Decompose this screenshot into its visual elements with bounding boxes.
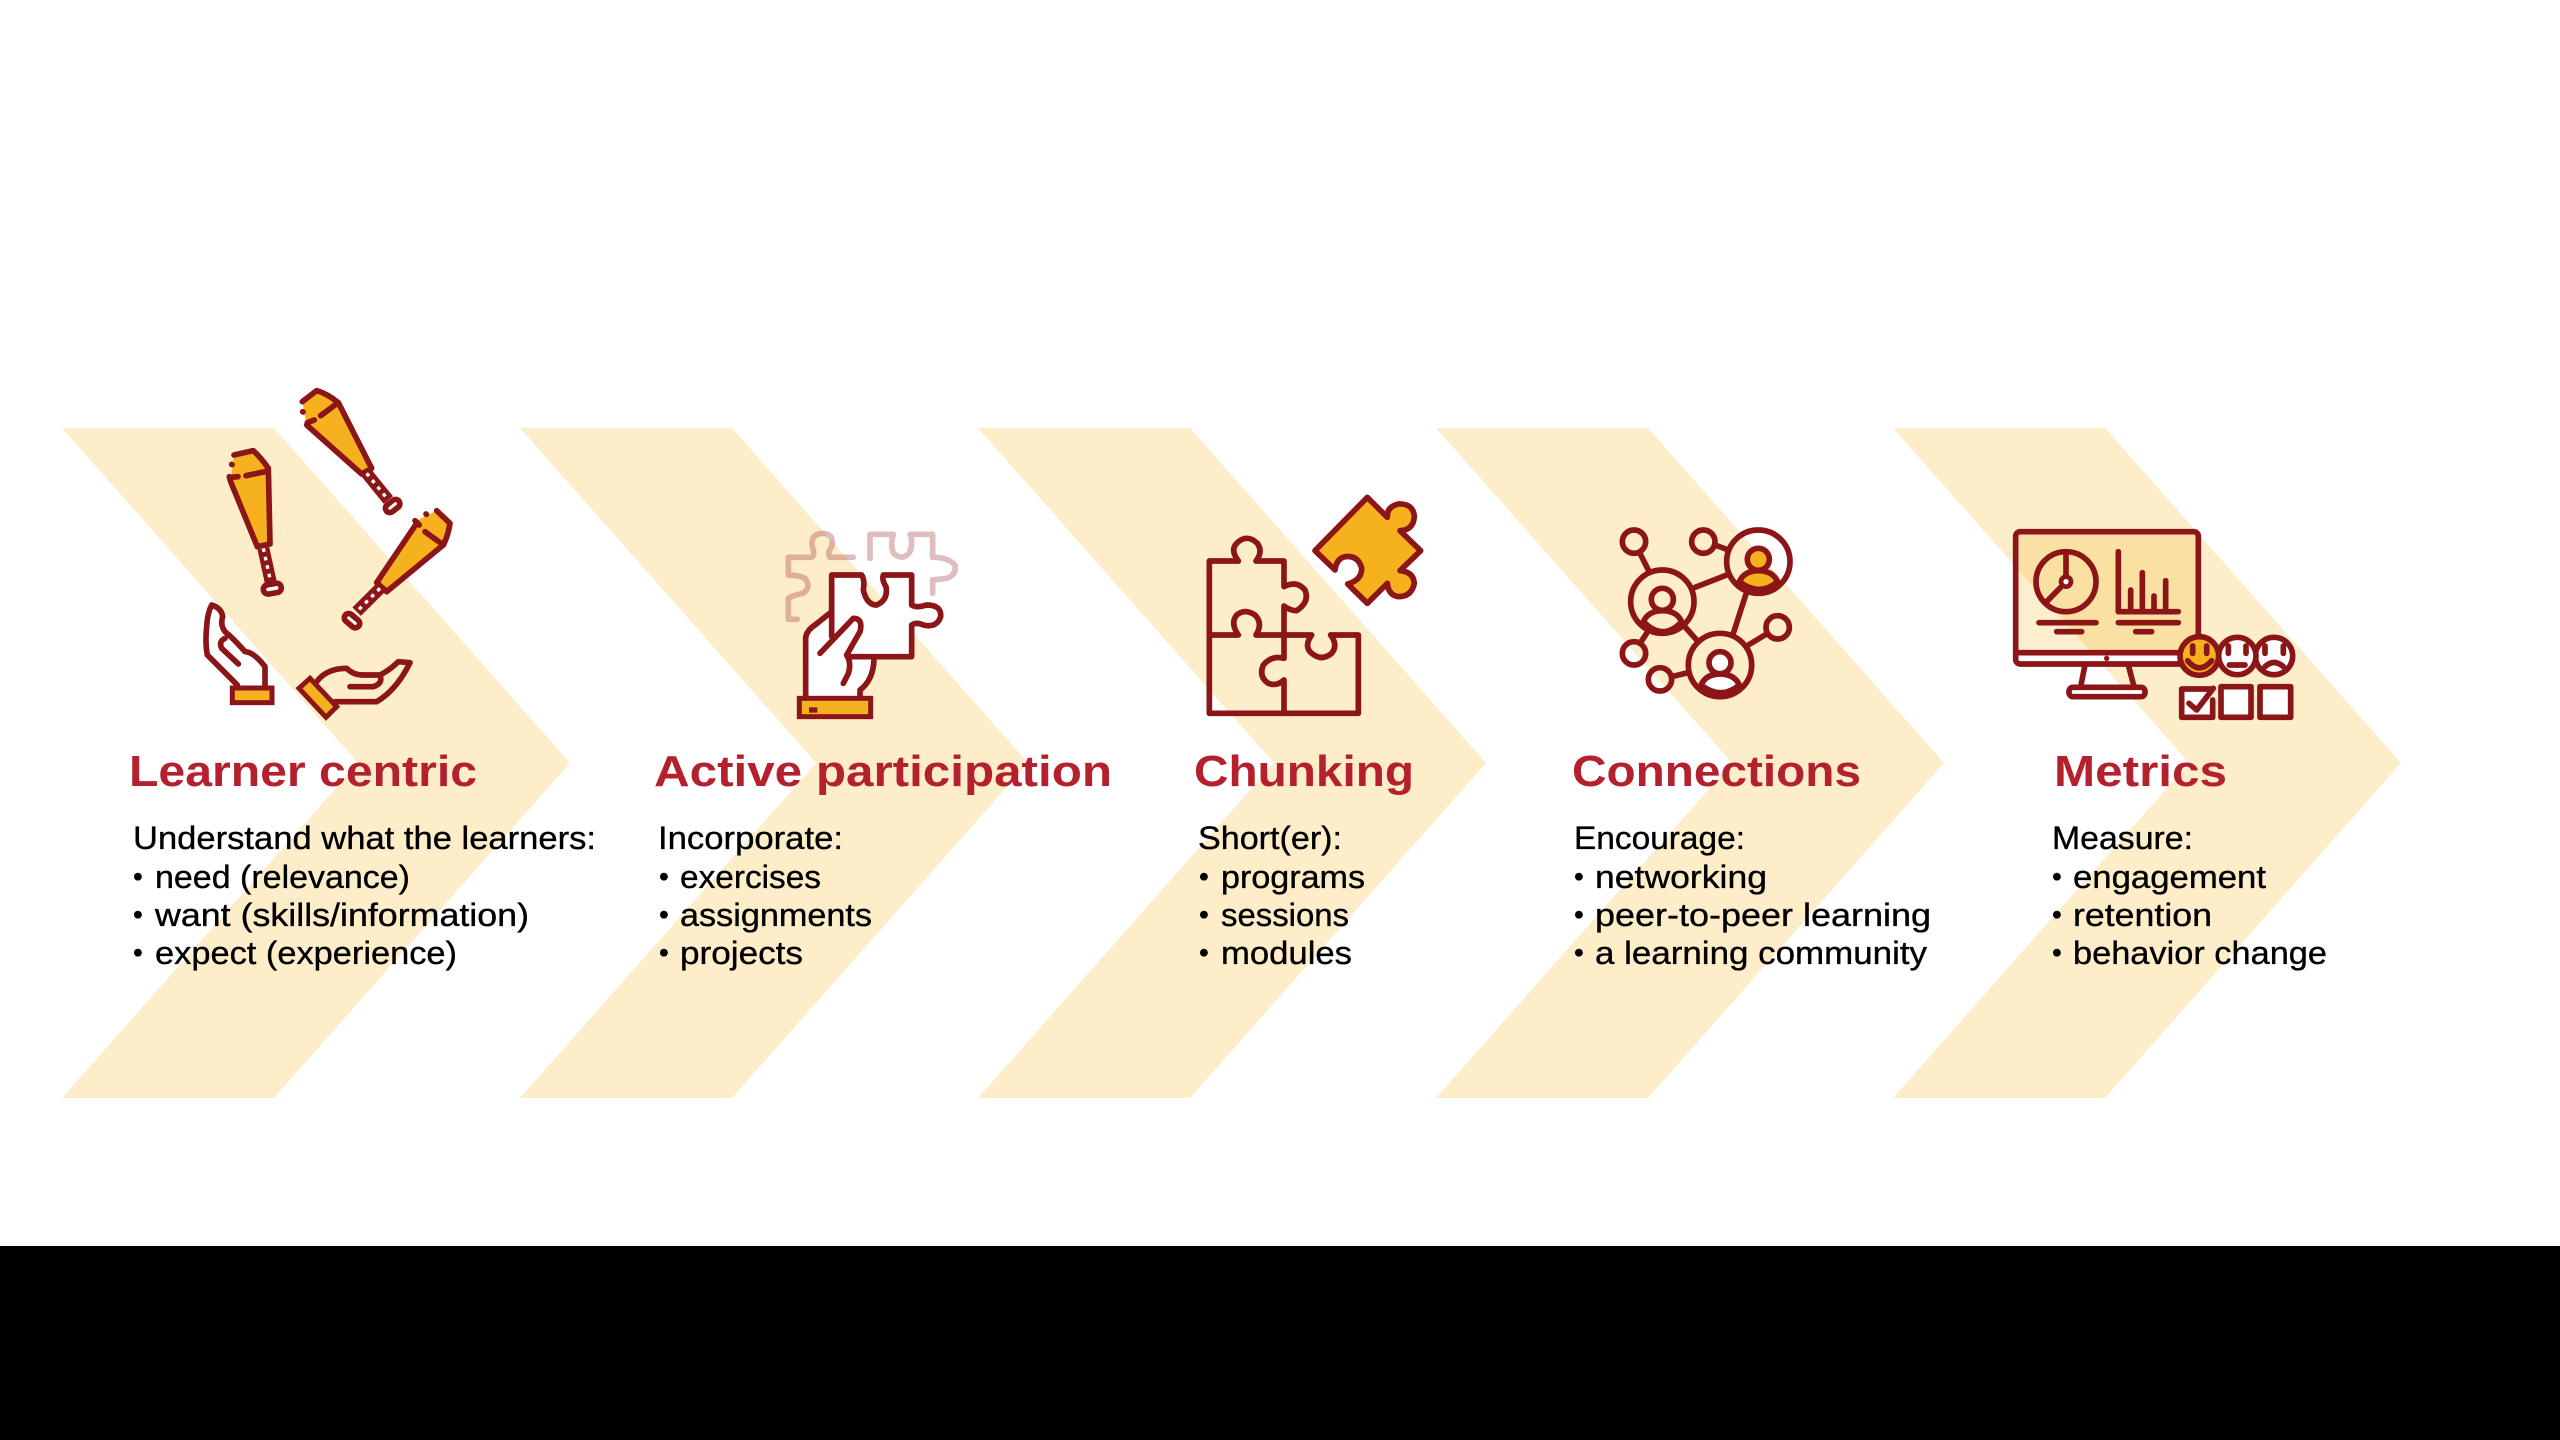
text block: • [2052,899,2062,930]
club right [343,511,450,630]
text block: • [133,861,143,892]
left hand [206,605,272,703]
text block [133,820,596,971]
text block: peer-to-peer learning [1595,897,1931,933]
text block: • [2052,861,2062,892]
heading: Active participation [654,747,1112,796]
text block: • [133,899,143,930]
text block: Measure: [2052,820,2193,856]
heading: Metrics [2054,747,2227,796]
text block [1574,820,1931,971]
assembled pieces [1209,538,1358,713]
icon: hand holding puzzle piece [788,533,955,717]
text block: modules [1221,935,1352,971]
text block: • [659,899,669,930]
text block: sessions [1221,897,1349,933]
chevron arrows [62,428,2401,1098]
icon: monitor dashboard with ratings [2016,532,2293,717]
faded puzzle pieces [788,533,955,619]
text block: programs [1221,859,1365,895]
happy face [2180,637,2219,675]
heading: Learner centric [129,747,477,796]
text block: Incorporate: [658,820,843,856]
text block: retention [2073,897,2212,933]
text block: exercises [680,859,821,895]
text block [2052,820,2327,971]
text block: behavior change [2073,935,2327,971]
column: Learner centric [129,747,596,971]
checkboxes [2182,687,2291,717]
text block: • [659,861,669,892]
club top [302,391,402,514]
icon: jigsaw puzzle pieces [1209,497,1421,713]
main puzzle piece [832,575,941,657]
text block: • [1199,899,1209,930]
person bottom [1688,633,1752,697]
connecting lines [1640,545,1767,677]
column: Metrics [2052,747,2327,971]
club left [229,451,282,595]
text block [658,820,872,971]
text block: • [1199,937,1209,968]
text block [1198,820,1365,971]
text block: a learning community [1595,935,1927,971]
monitor [2016,532,2198,697]
neutral face [2219,637,2256,675]
text block: Short(er): [1198,820,1342,856]
text block: Understand what the learners: [133,820,596,856]
text block: • [1199,861,1209,892]
pie chart [2036,552,2096,632]
black footer band [0,1246,2560,1440]
icon: people network [1622,530,1790,697]
text block: expect (experience) [155,935,457,971]
heading: Chunking [1194,747,1414,796]
column: Chunking [1194,747,1414,971]
piece and hand outlines [806,575,941,698]
sad face [2255,637,2293,675]
small nodes [1622,530,1789,691]
text block: projects [680,935,803,971]
text block: Encourage: [1574,820,1745,856]
person left [1631,570,1694,633]
text block: networking [1595,859,1767,895]
text block: want (skills/information) [154,897,529,933]
text block: • [1574,861,1584,892]
amber piece [1315,497,1421,603]
text block: need (relevance) [155,859,410,895]
right hand [299,662,410,717]
hand fill [806,612,874,698]
text block: engagement [2073,859,2266,895]
icon: juggling clubs and hands [206,391,450,717]
cuff [799,698,871,717]
text block: assignments [680,897,872,933]
text block: • [133,937,143,968]
text block: • [1574,899,1584,930]
bar chart [2118,552,2178,632]
text block: • [1574,937,1584,968]
person top right [1727,530,1790,593]
column: Connections [1572,747,1931,971]
heading: Connections [1572,747,1861,796]
column: Active participation [654,747,1112,971]
text block: • [2052,937,2062,968]
text block: • [659,937,669,968]
